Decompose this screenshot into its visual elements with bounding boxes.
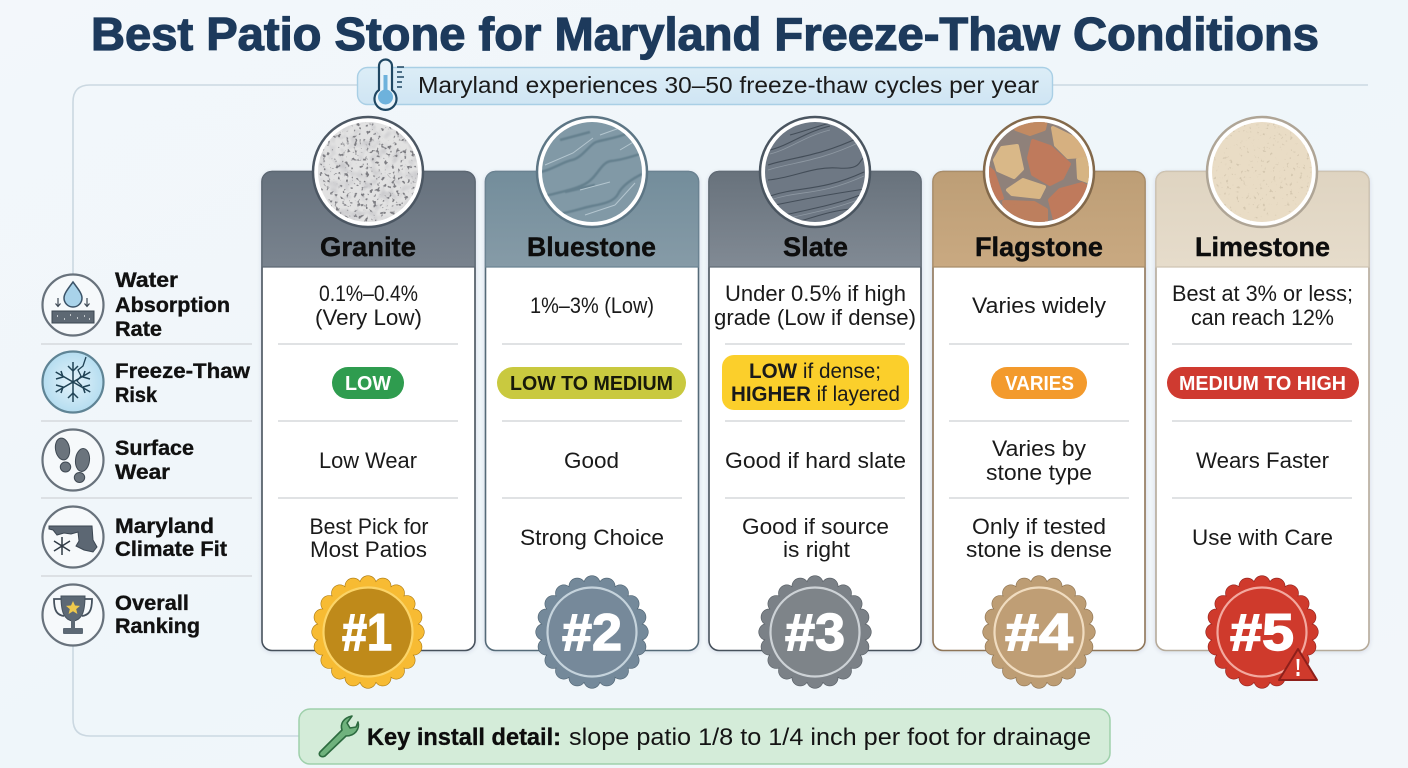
surface wear value: Good [564,448,619,473]
panel: granite: Granite [320,232,416,262]
row: overall ranking: Ranking [115,615,200,638]
row: freeze-thaw risk: Freeze-Thaw [115,360,251,383]
callout: key install detail: Key install detail: [367,724,561,751]
icon: cracked snowflake [42,352,104,412]
row: freeze-thaw risk: Risk [115,384,157,407]
row: water absorption rate: Absorption [115,294,230,317]
panel: flagstone: Flagstone [975,232,1103,262]
callout: key install detail [299,709,1110,764]
rank badge: 5 with warning: #5 [1230,604,1294,662]
water absorption value: Varies widely [972,293,1106,318]
surface wear value: Wears Faster [1196,448,1329,473]
banner: freeze-thaw cycles: Maryland experiences 30–50 freeze-thaw cycles per year [418,72,1039,98]
surface wear value: stone type [986,460,1092,485]
row: maryland climate fit: Climate Fit [115,538,227,561]
panel: limestone [1156,117,1369,680]
row: freeze-thaw risk [42,352,251,412]
stone swatch: flagstone [984,117,1094,227]
risk pill: medium to high [1167,367,1359,399]
risk pill: low if dense, higher if layered: LOW if dense; [749,360,881,383]
callout: key install detail: slope patio 1/8 to 1/4 inch per foot for drainage [569,724,1091,751]
row: water absorption rate: Water [115,269,178,292]
risk pill: low to medium [497,367,686,399]
icon: maryland map with snowflake [42,506,104,568]
stone swatch: bluestone [537,117,647,227]
panel: slate: Slate [783,232,848,262]
water absorption value: Under 0.5% if high [725,281,906,306]
risk pill: low to medium: LOW TO MEDIUM [510,373,673,395]
row: water absorption rate: Rate [115,318,162,341]
stone swatch: limestone [1207,117,1317,227]
climate fit value: Strong Choice [520,525,664,550]
icon: warning triangle [1279,649,1317,680]
row: maryland climate fit [42,506,227,568]
surface wear value: Low Wear [319,448,417,473]
climate fit value: Only if tested [972,514,1106,539]
row: overall ranking [42,584,200,646]
water absorption value [1172,281,1353,330]
rank badge: 1: #1 [342,604,392,662]
rank badge: 2: #2 [562,604,622,662]
stone swatch: granite [313,117,423,227]
row: surface wear: Surface [115,437,194,460]
risk pill: low [332,367,404,399]
water absorption value: grade (Low if dense) [714,305,916,330]
water absorption value: 0.1%–0.4% [319,281,418,306]
risk pill: medium to high: MEDIUM TO HIGH [1179,373,1346,395]
rank badge: 5 with warning [1214,584,1317,680]
climate fit value: Use with Care [1192,525,1333,550]
panel: bluestone [486,117,698,680]
connector lines [73,85,1368,736]
water absorption value: (Very Low) [315,305,422,330]
icon: footprints [42,430,104,490]
water absorption value [714,281,916,330]
surface wear value: Good if hard slate [725,448,906,473]
row: water absorption rate [42,269,230,341]
left row labels [41,269,252,646]
water absorption value [315,281,422,330]
climate fit value [742,514,889,562]
rank badge: 4: #4 [1005,604,1073,662]
climate fit value: Good if source [742,514,889,539]
rank badge: 2 [544,584,640,680]
surface wear value: Varies by [992,436,1086,461]
rank badge: 3: #3 [785,604,845,662]
climate fit value [310,514,428,562]
icon: water drop on stone [42,274,104,336]
risk pill: low if dense, higher if layered: HIGHER if layered [731,383,900,406]
icon: wrench [319,716,358,757]
row: maryland climate fit: Maryland [115,515,214,538]
climate fit value: is right [783,537,850,562]
stone swatch: slate [760,117,870,227]
climate fit value: stone is dense [966,537,1112,562]
rank badge: 1 [320,584,416,680]
panel: bluestone: Bluestone [527,232,656,262]
surface wear value [986,436,1092,485]
row: surface wear [42,430,194,490]
risk pill: low: LOW [345,373,391,395]
panel: granite [262,117,475,680]
water absorption value: Best at 3% or less; [1172,281,1353,306]
panel: slate [709,117,921,680]
water absorption value: 1%–3% (Low) [530,293,654,318]
panel: limestone: Limestone [1195,232,1330,262]
risk pill: varies [991,367,1087,399]
icon: trophy [42,584,104,646]
water absorption value: can reach 12% [1191,305,1334,330]
climate fit value: Most Patios [310,537,427,562]
rank badge: 3 [767,584,863,680]
risk pill: varies: VARIES [1005,373,1074,395]
rank badge: 4 [991,584,1087,680]
icon: thermometer [375,60,404,110]
risk pill: low if dense, higher if layered [722,355,909,410]
panel: flagstone [933,117,1145,680]
row: overall ranking: Overall [115,592,189,615]
climate fit value [966,514,1112,562]
banner: freeze-thaw cycles [358,60,1052,110]
row: surface wear: Wear [115,461,170,484]
climate fit value: Best Pick for [310,514,428,539]
title: Best Patio Stone for Maryland Freeze-Thaw Conditions [91,8,1319,60]
